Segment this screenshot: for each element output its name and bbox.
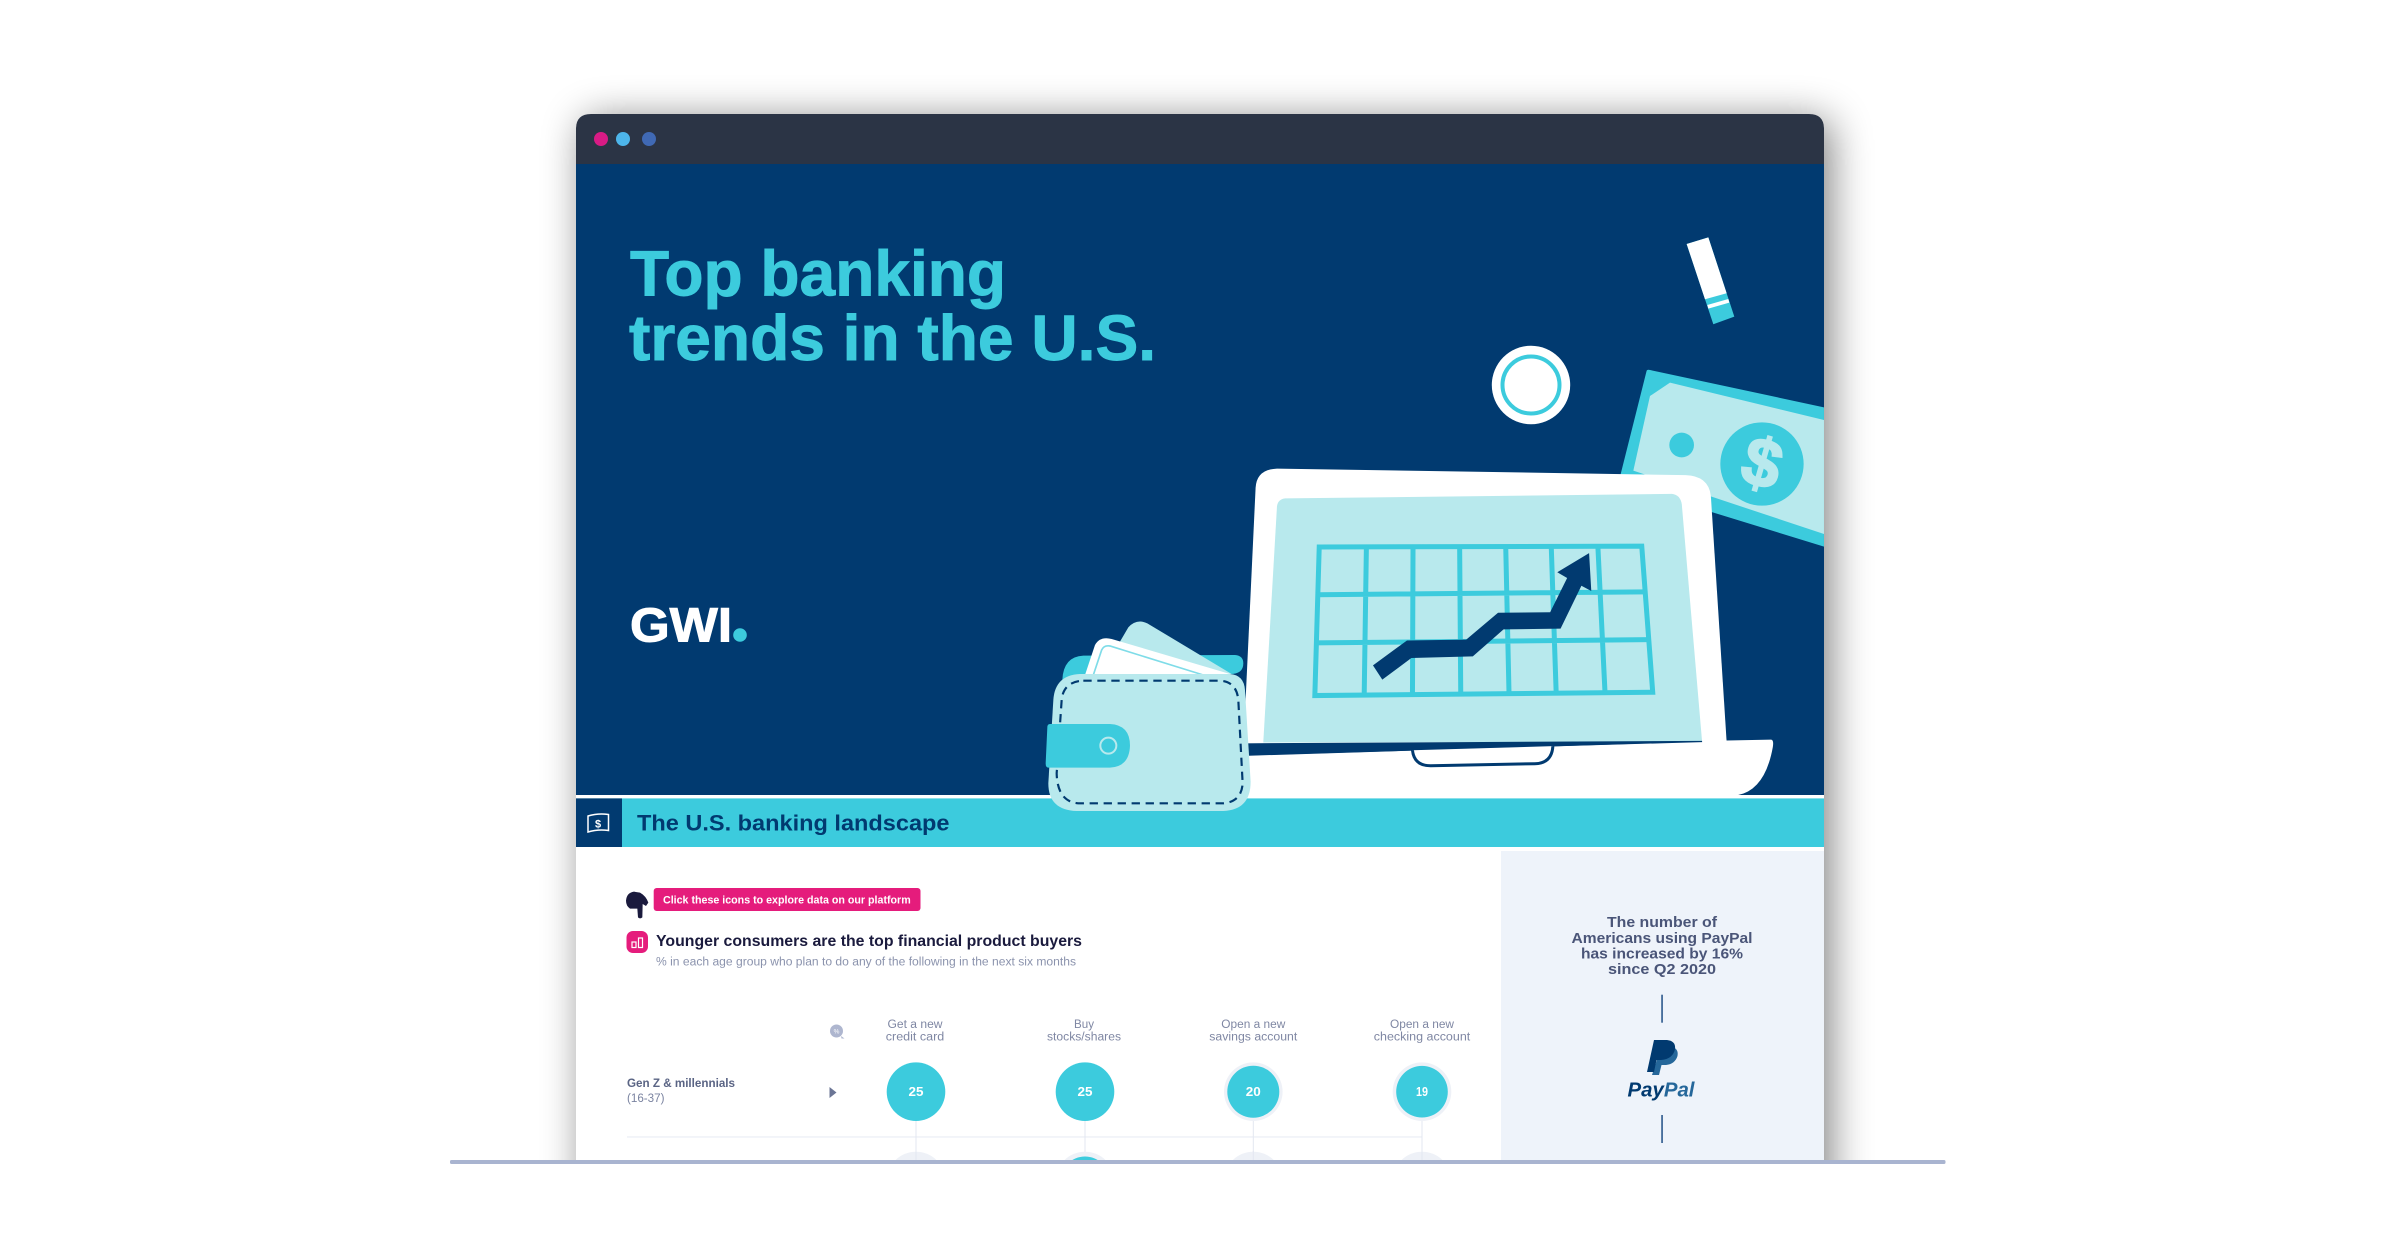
PayPal logo: [1628, 1040, 1695, 1102]
chart grid: [1314, 546, 1653, 696]
row label: [627, 1078, 836, 1105]
bubbles row one: [887, 1062, 1451, 1121]
column headers: stocks/shares: [1047, 1032, 1121, 1044]
column headers: [886, 1019, 1471, 1044]
wallet front: [1048, 674, 1251, 811]
icon box: $: [595, 818, 601, 830]
chart heading: Younger consumers are the top financial product buyers: [656, 933, 1082, 950]
GWI logo: GWI: [630, 600, 732, 652]
panel: sidebar PayPal fact: [1501, 851, 1824, 1160]
bubbles row one: 20: [1246, 1085, 1261, 1099]
search icon: %: [834, 1028, 840, 1036]
chart icon: [626, 931, 648, 953]
browser top bar: [576, 114, 1824, 164]
browser window: [576, 114, 1824, 1210]
title: [629, 248, 1152, 361]
back card: [1120, 622, 1232, 674]
laptop base: [1241, 740, 1773, 796]
section band: banking landscape: [576, 798, 1824, 847]
column headers: Get a new: [888, 1019, 943, 1031]
callout pill: [654, 888, 920, 911]
wallet clasp: [1046, 724, 1130, 768]
column headers: savings account: [1209, 1032, 1298, 1044]
laptop lid: [1244, 469, 1727, 744]
illustration: wallet: [1046, 622, 1251, 811]
chart heading: [656, 933, 1082, 968]
section heading: The U.S. banking landscape: [637, 811, 950, 836]
bubble chart: [627, 1020, 1470, 1160]
column headers: Buy: [1074, 1019, 1094, 1031]
wallet back: [1062, 655, 1244, 680]
callout pill: Click these icons to explore data on our platform: [663, 894, 911, 906]
icon: banknote: $: [1733, 422, 1791, 505]
fact text: [1572, 914, 1752, 978]
icon: pencil: [1687, 237, 1734, 324]
front card: [1085, 638, 1230, 675]
fact text: has increased by 16%: [1581, 946, 1743, 963]
search icon: [830, 1024, 844, 1038]
bubbles row one: 19: [1416, 1085, 1428, 1099]
infographic canvas: [450, 114, 1946, 1164]
device base line: [450, 1160, 1946, 1164]
trackpad notch: [1412, 746, 1553, 766]
column headers: credit card: [886, 1032, 944, 1044]
column headers: checking account: [1374, 1032, 1471, 1044]
icon: coin: [1492, 346, 1570, 424]
bubbles row one: 25: [1078, 1085, 1093, 1099]
PayPal logo: PayPal: [1628, 1080, 1695, 1102]
column headers: Open a new: [1390, 1019, 1455, 1031]
fact text: since Q2 2020: [1608, 961, 1716, 978]
bubbles row two: [896, 1152, 1442, 1160]
icon box: [576, 798, 622, 847]
GWI logo: [632, 608, 747, 642]
row label: (16-37): [627, 1093, 665, 1105]
illustration: laptop: [1241, 469, 1773, 796]
pointing hand icon: [626, 892, 648, 918]
chart grid lines: [627, 1121, 1422, 1152]
panel: hero: [576, 164, 1824, 798]
fact text: The number of: [1607, 914, 1718, 931]
rising arrow: [1373, 553, 1591, 680]
icon: banknote: [1618, 370, 1824, 547]
column headers: Open a new: [1221, 1019, 1286, 1031]
page background: [576, 164, 1824, 1160]
title: Top banking: [630, 238, 1006, 310]
title: trends in the U.S.: [629, 302, 1156, 374]
chart heading: % in each age group who plan to do any of the following in the next six months: [656, 956, 1076, 968]
bubbles row one: 25: [908, 1085, 924, 1099]
laptop screen: [1263, 494, 1702, 742]
fact text: Americans using PayPal: [1572, 930, 1752, 947]
row label: Gen Z & millennials: [627, 1078, 735, 1090]
